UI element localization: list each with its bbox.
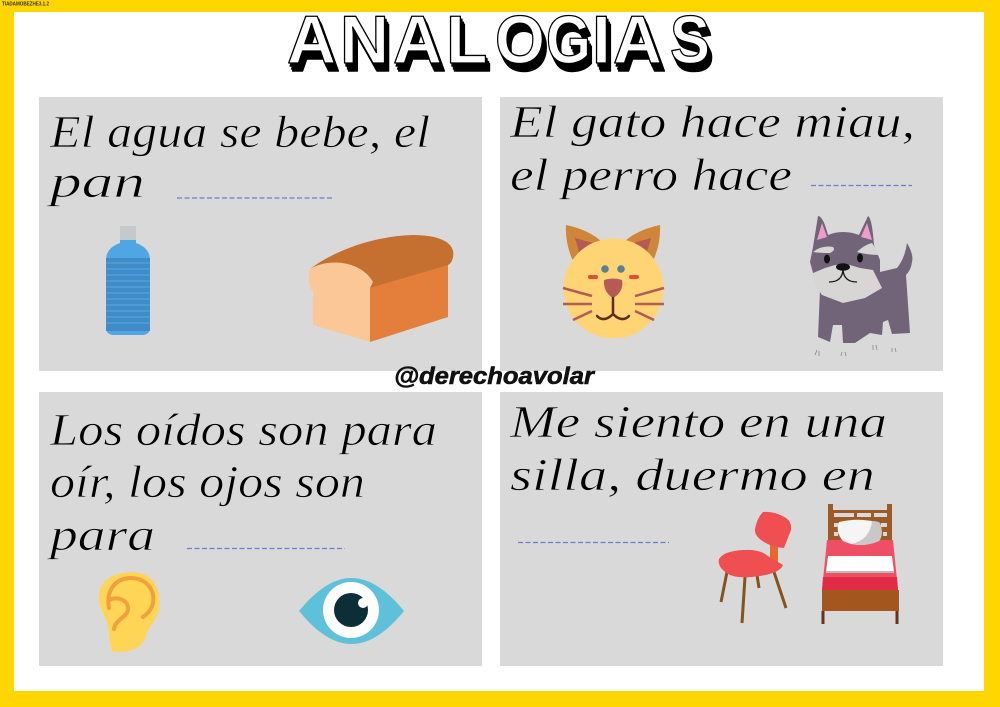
small top-left mark: TIADAMOBEZHE3.1.2 — [2, 2, 49, 8]
title: IA — [594, 5, 664, 81]
answer line 2 — [811, 184, 912, 186]
title — [287, 2, 714, 86]
question text 4: silla, duermo en — [510, 449, 875, 500]
icon: schnauzer dog — [810, 216, 912, 356]
title: G — [550, 10, 595, 86]
icon: chair — [719, 512, 791, 623]
title: ANAL — [290, 8, 491, 84]
panel: cat and dog — [500, 96, 943, 371]
title: S — [672, 5, 712, 81]
icon: eye — [299, 578, 404, 644]
question text 2: el perro hace — [510, 149, 792, 200]
title: O — [499, 10, 549, 86]
title: O — [498, 8, 548, 84]
panel: ear and eye — [39, 392, 482, 666]
title: IA — [592, 2, 662, 78]
title: G — [548, 5, 592, 81]
icon: cat face — [563, 225, 664, 338]
panel: water and bread — [39, 97, 482, 371]
question text 1 — [46, 106, 430, 207]
title: ANAL — [291, 10, 492, 86]
question text 1: El agua se bebe, el — [49, 106, 430, 157]
icon: bed — [822, 504, 899, 624]
watermark: @derechoavolar — [394, 363, 596, 390]
answer line 4 — [518, 542, 669, 544]
title: O — [496, 5, 546, 81]
question text 3: Los oídos son para — [49, 404, 437, 455]
icon: water bottle — [106, 226, 150, 335]
question text 3: oír, los ojos son — [50, 456, 365, 507]
question text 4: Me siento en una — [509, 396, 887, 447]
answer line 3 — [187, 548, 345, 550]
title: S — [673, 8, 713, 84]
question text 2: El gato hace miau, — [509, 96, 915, 147]
title: IA — [595, 8, 665, 84]
question text 2 — [509, 96, 915, 200]
title: G — [546, 2, 591, 78]
question text 3 — [46, 404, 437, 560]
icon: bread loaf — [309, 235, 453, 342]
question text 4 — [509, 396, 887, 500]
title: IA — [596, 10, 666, 86]
icon: ear — [99, 572, 159, 652]
title: S — [674, 10, 714, 86]
title: ANAL — [288, 5, 489, 81]
title: ANAL — [287, 2, 488, 78]
title: G — [549, 8, 594, 84]
question text 3: para — [46, 509, 155, 560]
answer line 1 — [177, 197, 334, 199]
panel: chair and bed — [500, 392, 943, 666]
title: S — [670, 2, 710, 78]
question text 1: pan — [46, 156, 145, 207]
title: O — [495, 2, 545, 78]
